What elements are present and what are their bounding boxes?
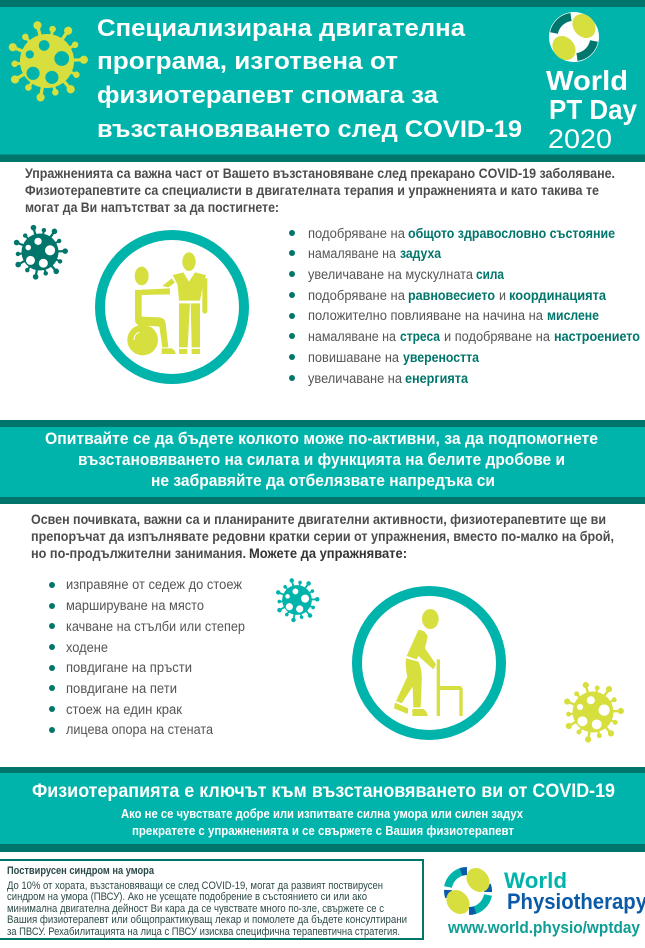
band: physiotherapy is the key [0,767,645,852]
logo: World PT Day 2020: PT Day [549,94,638,125]
panel: post-viral fatigue syndrome: синдром на умора (ПВСУ). Ако не усещате подобрение в състоянието си или ако [7,891,367,903]
list: benefits: и [499,288,506,303]
list: benefits: енергията [405,371,468,386]
list: exercises: маршируване на място [66,598,204,613]
paragraph: planned activities: Освен почивката, важни са и планираните двигателни активности, физиотерапевтите ще ви [31,512,606,527]
list: benefits: общото здравословно състояние [408,226,615,241]
paragraph: planned activities: Можете да упражнявате: [249,546,407,561]
list: benefits: равновесието [408,288,495,303]
band: stay active message [0,420,645,504]
intro paragraph [25,166,615,215]
list: benefits: повишаване на [308,350,399,365]
band: stay active message: Опитвайте се да бъдете колкото може по-активни, за да подпомогнете [45,430,598,448]
list: exercises: ходене [66,640,108,655]
title: програма, изготвена от [97,48,398,75]
panel: post-viral fatigue syndrome [0,860,423,939]
icon: lime virus small [563,681,624,743]
header band [0,0,645,162]
logo: World Physiotherapy: World [504,868,567,893]
list: benefits: увеличаване на мускулната [308,267,473,282]
list: benefits: координацията [509,288,606,303]
panel: post-viral fatigue syndrome: минимална двигателна дейност Ви кара да се чувствате много по-зле, свържете се с [7,903,385,915]
list: benefits: задуха [400,246,441,261]
list: exercises: повдигане на пръсти [66,660,192,675]
panel: post-viral fatigue syndrome: за ПВСУ. Рехабилитацията на лица с ПВСУ изисква специфична терапевтична стратегия. [7,926,400,938]
band: stay active message: не забравяйте да отбелязвате напредъка си [151,472,495,490]
list: benefits: стреса [400,329,440,344]
logo: World PT Day 2020: 2020 [548,124,612,154]
list: exercises: стоеж на един крак [66,702,182,717]
band: stay active message: възстановяването на силата и функцията на белите дробове и [78,451,565,469]
list: benefits: подобряване на [308,288,405,303]
icon: dark virus [13,224,68,280]
panel: post-viral fatigue syndrome: Поствирусен синдром на умора [7,865,155,877]
icon: teal virus [275,578,320,623]
paragraph: planned activities: но по-продължителни занимания. [31,546,246,561]
title: Специализирана двигателна [97,15,465,42]
list: exercises [49,577,245,737]
list: benefits: намаляване на [308,329,396,344]
title [97,15,522,143]
list: exercises: качване на стълби или степер [66,619,245,634]
icon: physiotherapist with patient in circle [100,235,244,379]
list: exercises: лицева опора на стената [66,722,213,737]
panel: post-viral fatigue syndrome: До 10% от хората, възстановяващи се след COVID-19, могат да развият поствирусен [7,880,383,892]
intro paragraph: Физиотерапевтите са специалисти в двигателната терапия и упражненията и като такива те [25,183,599,198]
list: benefits: настроението [554,329,640,344]
title: физиотерапевт спомага за [97,82,438,109]
list: benefits: и подобряване на [444,329,550,344]
list: benefits: увереността [403,350,479,365]
list: benefits: положително повлияване на начина на [308,308,543,323]
list: benefits: подобряване на [308,226,405,241]
logo: World PT Day 2020 [546,9,638,154]
paragraph: planned activities: препоръчат да изпълнявате редовни кратки серии от упражнения, вместо по-малко на брой, [31,529,614,544]
list: exercises: изправяне от седеж до стоеж [66,577,242,592]
logo: World Physiotherapy [442,863,645,937]
logo: World PT Day 2020: World [546,65,628,96]
paragraph: planned activities [31,512,614,561]
list: benefits: сила [476,267,504,282]
list: benefits: увеличаване на [308,371,402,386]
list: benefits: мислене [547,308,599,323]
list: benefits [289,226,640,386]
band: physiotherapy is the key: прекратете с упражненията и се свържете с Вашия физиотерапевт [132,824,514,838]
intro paragraph: могат да Ви напътстват за да постигнете: [25,200,279,215]
list: exercises: повдигане на пети [66,681,177,696]
panel: post-viral fatigue syndrome: Вашия физиотерапевт или общопрактикуващ лекар и помолете да бъдете консултирани [7,914,407,926]
band: physiotherapy is the key: Ако не се чувствате добре или изпитвате силна умора или силен задух [121,807,523,821]
icon: elderly person with walker in circle [357,591,501,735]
list: benefits: намаляване на [308,246,396,261]
icon: lime virus [7,20,88,102]
title: възстановяването след COVID-19 [97,116,522,143]
